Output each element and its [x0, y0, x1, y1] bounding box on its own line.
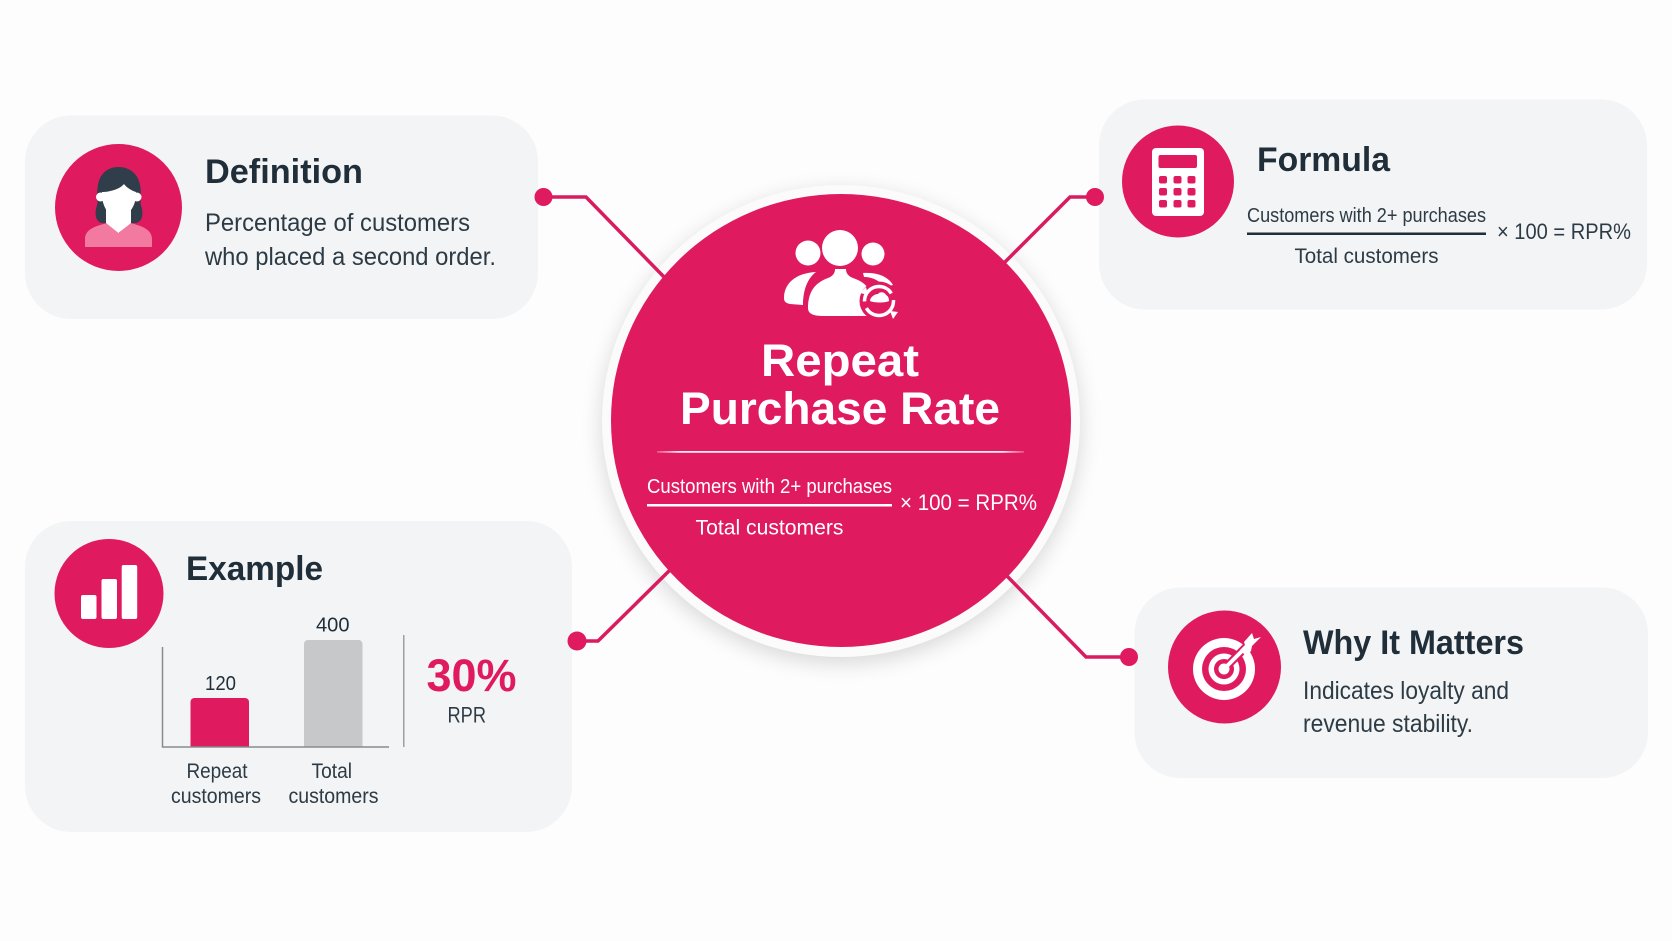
stat: 30% rpr: RPR	[448, 702, 486, 728]
stat: 30% rpr: 30%	[426, 650, 516, 701]
connector: definition	[534, 188, 665, 278]
heading: definition: Definition	[205, 153, 363, 191]
title: Repeat	[761, 335, 919, 386]
central circle: content	[611, 194, 1071, 647]
heading: why it matters: Why It Matters	[1303, 624, 1524, 662]
heading: formula: Formula	[1257, 141, 1391, 179]
bar chart: repeat vs total customers: 120	[205, 673, 236, 695]
icon: person	[55, 144, 182, 271]
panel: why it matters	[1134, 588, 1648, 778]
formula: fraction: Customers with 2+ purchases	[1247, 204, 1486, 227]
panel: formula	[1099, 100, 1647, 310]
icon: calculator	[1122, 126, 1234, 238]
formula: center fraction	[647, 475, 1037, 540]
text: why it matters body: revenue stability.	[1303, 710, 1473, 738]
formula: center fraction: × 100 = RPR%	[900, 490, 1037, 515]
formula: fraction: × 100 = RPR%	[1497, 219, 1631, 244]
heading: example: Example	[186, 550, 323, 588]
icon: target with arrow	[1168, 610, 1281, 724]
text: why it matters body: Indicates loyalty and	[1303, 677, 1509, 705]
formula: center fraction: Total customers	[696, 516, 844, 540]
bar chart: repeat vs total customers: customers	[171, 785, 261, 808]
stat: 30% rpr	[426, 650, 516, 728]
text: why it matters body	[1303, 677, 1509, 738]
bar chart: repeat vs total customers: customers	[288, 785, 378, 808]
formula: center fraction: Customers with 2+ purchases	[647, 475, 892, 498]
title: Purchase Rate	[680, 383, 1000, 434]
connector: why it matters	[1006, 575, 1138, 666]
connector: example	[568, 570, 670, 650]
connector: formula	[1003, 188, 1104, 264]
bar chart: repeat vs total customers: Repeat	[186, 760, 248, 783]
icon: customers with repeat badge	[784, 230, 898, 320]
icon: bar chart	[54, 539, 164, 648]
central circle: outer ring	[602, 185, 1080, 663]
bar chart: repeat vs total customers: 400	[316, 614, 350, 636]
title	[680, 335, 1000, 434]
text: definition body: Percentage of customers	[205, 209, 470, 237]
formula: fraction	[1247, 204, 1631, 268]
formula: fraction: Total customers	[1294, 245, 1438, 268]
text: definition body: who placed a second order.	[204, 243, 496, 271]
bar chart: repeat vs total customers	[162, 614, 389, 808]
panel: example	[25, 521, 572, 832]
text: definition body	[204, 209, 496, 271]
panel: definition	[25, 116, 538, 319]
bar chart: repeat vs total customers: Total	[312, 760, 352, 783]
